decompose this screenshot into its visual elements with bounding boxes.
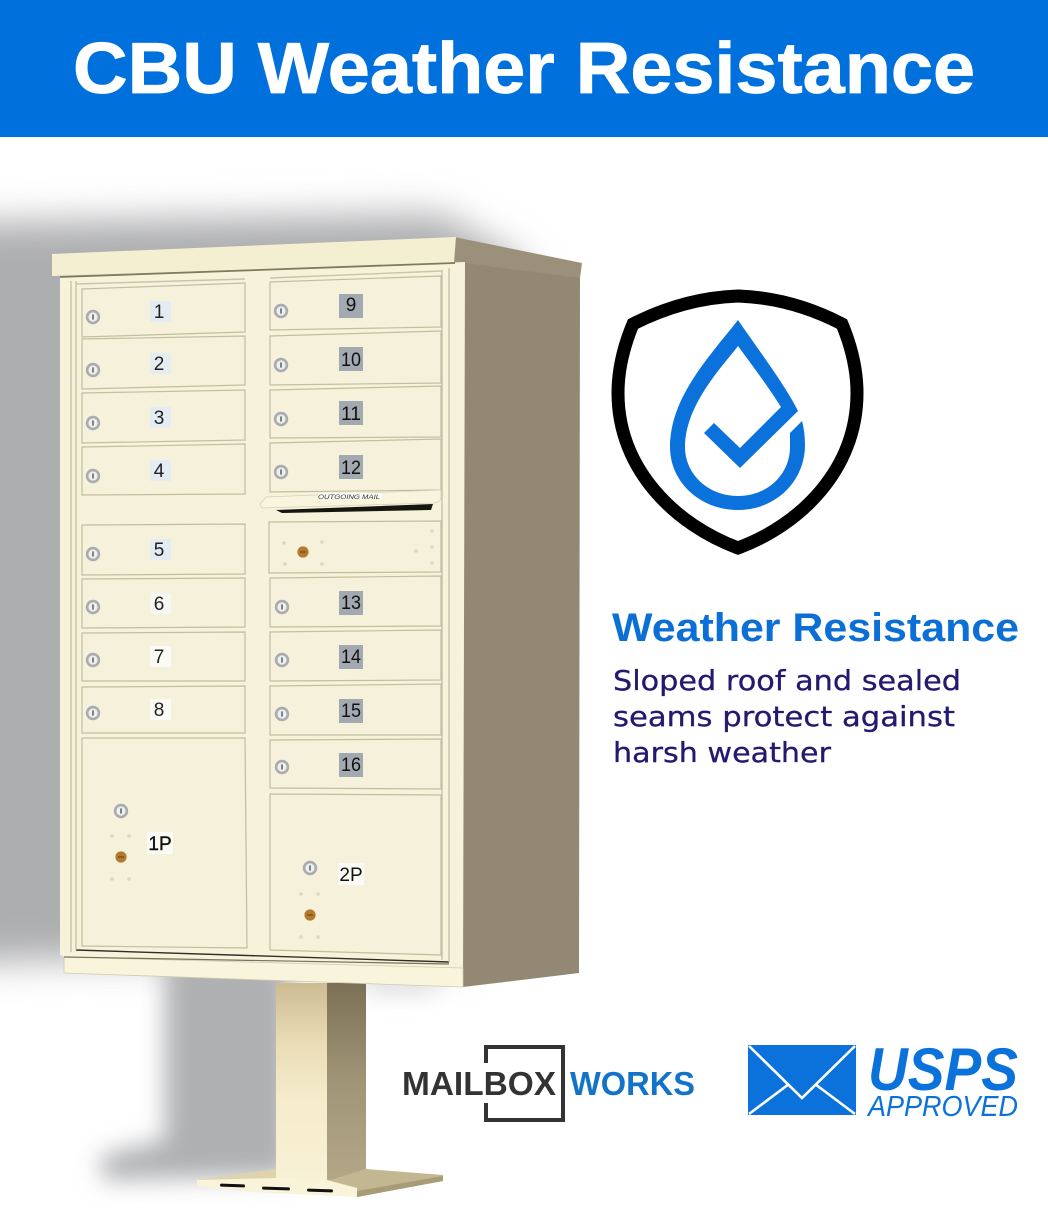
door 10 (270, 331, 441, 385)
door 9: 9 (346, 295, 356, 316)
door 1 (82, 283, 245, 337)
door 12 (270, 439, 441, 492)
door 8: 8 (154, 700, 164, 721)
parcel door 1P (82, 738, 247, 948)
parcel door 2P (270, 794, 441, 955)
door 2: 2 (154, 354, 164, 375)
door 15: 15 (341, 701, 361, 722)
door 1: 1 (154, 302, 164, 323)
outgoing access door (269, 521, 441, 573)
door 14 (270, 630, 441, 681)
description text (613, 664, 961, 769)
description text: Sloped roof and sealed (613, 664, 961, 697)
door 3 (82, 390, 245, 443)
bottom ledge (64, 957, 463, 987)
outgoing mail slot: OUTGOING MAIL (318, 494, 380, 501)
cabinet roof front (52, 237, 456, 276)
parcel door 1P: 1P (148, 834, 172, 855)
cabinet side panel (462, 262, 580, 987)
logo: usps approved: USPS (868, 1036, 1018, 1103)
door 14: 14 (341, 647, 361, 668)
logo: usps approved (748, 1036, 1018, 1123)
post (276, 983, 366, 1181)
door 11 (270, 386, 441, 438)
door 3: 3 (154, 408, 164, 429)
door 6 (82, 578, 245, 628)
door 8 (82, 686, 245, 733)
description text: seams protect against (613, 700, 955, 733)
door 4: 4 (154, 461, 165, 482)
description text: harsh weather (613, 736, 832, 769)
logo: mailbox works: WORKS (570, 1065, 695, 1102)
door 15 (270, 684, 441, 735)
logo: usps approved: APPROVED (866, 1091, 1018, 1123)
door 12: 12 (341, 458, 361, 479)
door 4 (82, 444, 245, 495)
door 5: 5 (154, 540, 164, 561)
title: CBU Weather Resistance (73, 29, 975, 109)
cast shadow behind mailbox (0, 214, 525, 1180)
door 10: 10 (341, 350, 361, 371)
heading: weather resistance: Weather Resistance (612, 606, 1019, 650)
mailbox unit (52, 237, 582, 1197)
cabinet front frame (60, 262, 465, 987)
header banner (0, 0, 1048, 137)
door 13 (270, 576, 441, 627)
logo: mailbox works: MAILBOX (402, 1065, 556, 1102)
door 11: 11 (341, 404, 361, 425)
right door column (260, 276, 441, 955)
pedestal base plate (197, 1169, 443, 1197)
parcel door 2P: 2P (339, 865, 363, 886)
door 2 (82, 336, 245, 389)
door 9 (270, 276, 441, 330)
door 13: 13 (341, 593, 361, 614)
door 16: 16 (341, 755, 361, 776)
door 6: 6 (154, 594, 164, 615)
logo: mailbox works (402, 1047, 695, 1120)
door 7: 7 (154, 647, 164, 668)
door 16 (270, 739, 441, 789)
door 5 (82, 524, 245, 575)
icon: envelope (748, 1045, 856, 1115)
cabinet roof side (450, 237, 582, 278)
outgoing mail slot (260, 490, 441, 513)
icon: shield with water drop and check (618, 296, 857, 548)
left door column (82, 283, 247, 948)
door 7 (82, 632, 245, 681)
